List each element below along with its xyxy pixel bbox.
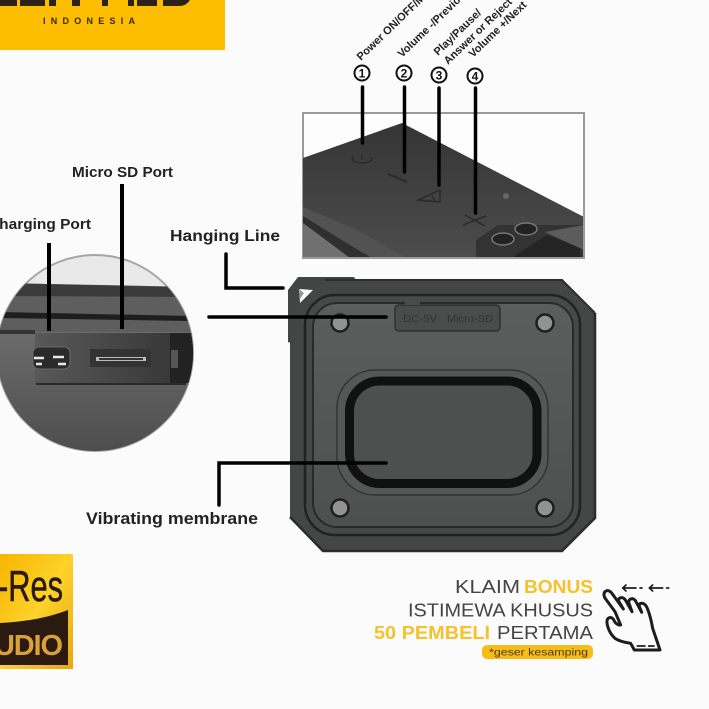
panel: speaker back view <box>288 277 595 551</box>
port cover label: Micro-SD <box>447 314 493 325</box>
button 2 callout: 2 <box>401 66 408 80</box>
swipe hint pill: *geser kesamping <box>489 648 588 658</box>
badge: Hi-Res Audio: -Res <box>0 562 63 611</box>
promo text: 50 PEMBELI <box>374 623 490 643</box>
screws <box>332 314 554 516</box>
label: micro SD port: Micro SD Port <box>72 164 173 181</box>
button 4 callout: Volume +/Next <box>467 0 529 60</box>
button 4 callout: 4 <box>472 70 479 84</box>
callout: vibrating membrane <box>86 463 386 528</box>
promo text: ISTIMEWA KHUSUS <box>408 600 593 620</box>
promo text: KLAIM <box>455 577 520 597</box>
icon: swipe hand <box>604 585 669 650</box>
icon: charging socket <box>33 347 70 369</box>
callout: ports pointer <box>209 315 386 319</box>
icon: micro SD slot <box>90 349 151 367</box>
button 2 callout <box>396 0 473 172</box>
callout: vibrating membrane: Vibrating membrane <box>86 510 258 528</box>
promo text: PERTAMA <box>497 623 593 643</box>
promo text: BONUS <box>524 577 593 597</box>
button 1 callout <box>354 0 442 143</box>
badge: Hi-Res Audio <box>0 554 73 669</box>
button 3 callout: Play/Pause/ <box>432 7 484 58</box>
label: charging port <box>0 216 91 331</box>
callout: hanging line <box>170 228 283 288</box>
port cover label: DC-5V <box>403 314 437 325</box>
panel: top buttons photo <box>303 113 584 258</box>
promo text <box>374 577 593 659</box>
button 3 callout <box>432 0 541 185</box>
brand banner <box>0 0 225 50</box>
callout: hanging line: Hanging Line <box>170 228 280 245</box>
brand banner: INDONESIA <box>43 16 136 26</box>
button 1 callout: 1 <box>359 66 366 80</box>
vibrating membrane <box>337 370 548 495</box>
button 4 callout <box>467 0 529 213</box>
swipe hint pill <box>482 645 593 659</box>
port cover label <box>395 297 500 331</box>
panel: port close-up circle <box>0 255 200 457</box>
hanging loop <box>288 277 358 345</box>
button 3 callout: 3 <box>436 68 443 82</box>
speaker body <box>290 280 595 551</box>
